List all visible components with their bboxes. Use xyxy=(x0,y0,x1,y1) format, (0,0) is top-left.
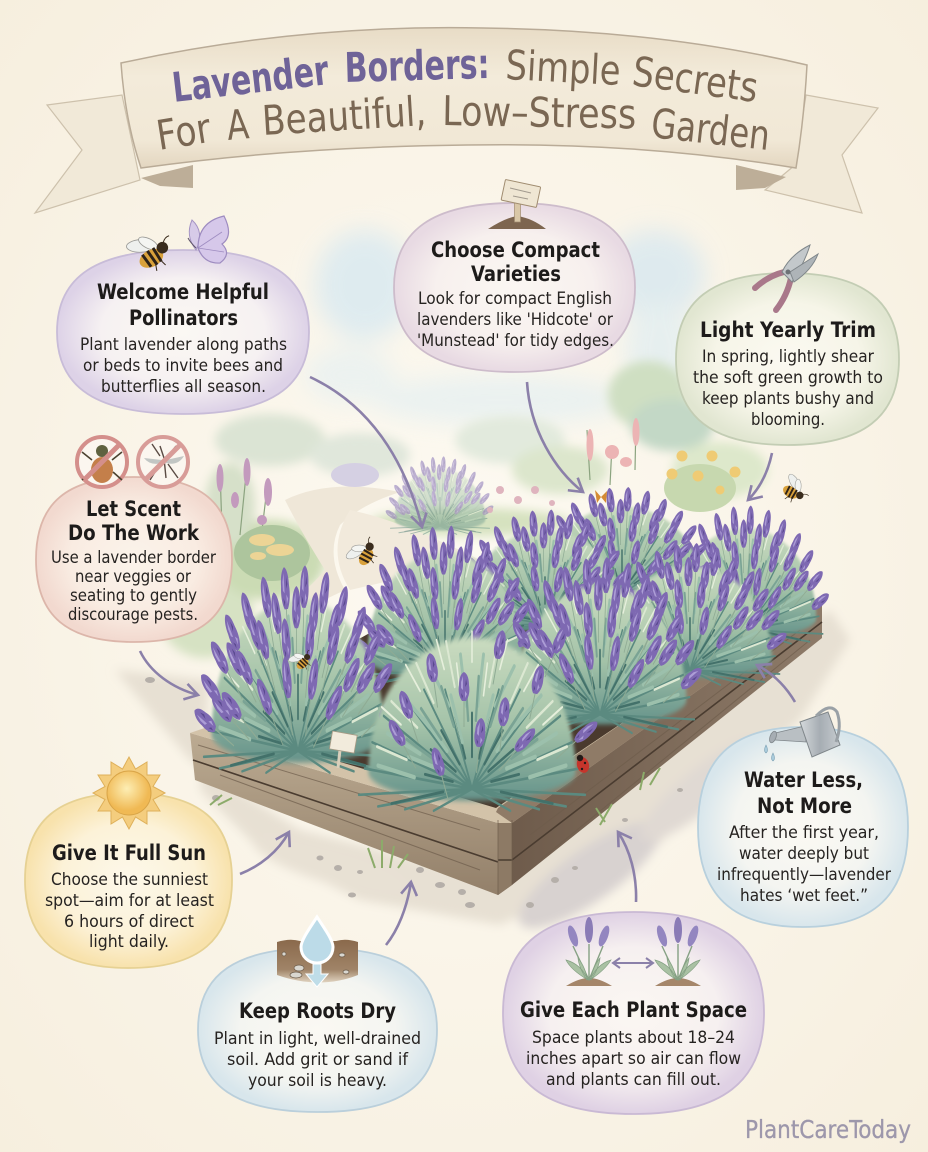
panel: let scent do the work: near veggies or xyxy=(75,567,192,587)
panel: water less, not more: infrequently—lavender xyxy=(717,865,892,885)
panel: let scent do the work: Let Scent xyxy=(86,497,181,521)
panel: choose compact varieties: lavenders like 'Hidcote' or xyxy=(417,310,614,330)
panel: keep roots dry: your soil is heavy. xyxy=(248,1071,387,1091)
icon: bee xyxy=(121,222,181,279)
icon: no beetle xyxy=(77,437,127,487)
icon: soil and water drop xyxy=(277,917,358,987)
icon: pruners xyxy=(755,245,818,310)
panel: light yearly trim: keep plants bushy and xyxy=(702,389,874,409)
icon: no mosquito xyxy=(138,437,188,487)
panel: give it full sun: spot—aim for at least xyxy=(45,891,214,911)
ladybug xyxy=(575,755,591,774)
panel: water less, not more: water deeply but xyxy=(739,844,869,864)
title: Lavender xyxy=(170,46,332,112)
panel: welcome helpful pollinators xyxy=(57,222,309,414)
panel: water less, not more: hates ‘wet feet.” xyxy=(740,886,868,906)
watermark: PlantCareToday xyxy=(745,1115,911,1144)
panel: welcome helpful pollinators: butterflies all season. xyxy=(101,377,266,397)
panel: let scent do the work xyxy=(36,437,232,642)
arrow: sun to bed xyxy=(240,832,289,874)
panel: let scent do the work: seating to gently xyxy=(70,586,197,606)
raised wooden bed xyxy=(190,560,822,895)
panel: water less, not more: Not More xyxy=(757,794,852,818)
arrow: roots to bed xyxy=(386,882,411,945)
panel: give each plant space xyxy=(503,912,764,1114)
panel: give it full sun: Give It Full Sun xyxy=(52,841,206,865)
panel: water less, not more xyxy=(698,708,908,927)
panel: welcome helpful pollinators: or beds to invite bees and xyxy=(83,356,283,376)
arrow: water to bed xyxy=(757,665,795,702)
panel: keep roots dry xyxy=(198,917,437,1112)
panel: choose compact varieties: Varieties xyxy=(471,262,561,286)
panel: choose compact varieties: Look for compact English xyxy=(418,289,612,309)
panel: give each plant space: inches apart so air can flow xyxy=(526,1049,741,1069)
garden background wash xyxy=(157,230,768,658)
title: Borders: xyxy=(344,40,490,92)
banner ribbon xyxy=(35,28,878,213)
panel: welcome helpful pollinators: Welcome Helpful xyxy=(97,280,269,304)
icon: watering can xyxy=(764,708,840,761)
panel: let scent do the work: discourage pests. xyxy=(68,605,198,625)
plant label in bed xyxy=(329,731,357,768)
panel: give it full sun: 6 hours of direct xyxy=(64,912,194,932)
panel: water less, not more: After the first year, xyxy=(729,823,879,843)
panel: keep roots dry: Keep Roots Dry xyxy=(239,999,396,1023)
title xyxy=(153,40,772,160)
panel: give it full sun xyxy=(25,757,232,968)
arrow: scent to bed xyxy=(140,651,198,695)
panel: keep roots dry: Plant in light, well-drained xyxy=(214,1029,421,1049)
arrow: pollinators to bed xyxy=(310,377,422,527)
panel: light yearly trim: In spring, lightly shear xyxy=(702,347,875,367)
panel: water less, not more: Water Less, xyxy=(744,768,863,792)
title: A xyxy=(225,100,251,150)
icon: plant sign xyxy=(488,179,546,229)
icon: two plants spaced apart xyxy=(566,917,701,986)
lavender bushes xyxy=(193,487,831,811)
panel: welcome helpful pollinators: Pollinators xyxy=(129,306,238,330)
arrow: trim to bed xyxy=(748,453,772,500)
title: Low–Stress xyxy=(442,87,637,138)
panel: light yearly trim: Light Yearly Trim xyxy=(700,318,876,342)
icon: butterfly xyxy=(188,216,229,263)
panel: choose compact varieties xyxy=(394,179,635,372)
panel: light yearly trim: the soft green growth to xyxy=(693,368,883,388)
title: For xyxy=(153,104,215,160)
panel: light yearly trim xyxy=(676,245,899,445)
arrow: compact varieties to bed xyxy=(527,382,583,492)
panel: give each plant space: Space plants about 18–24 xyxy=(532,1028,735,1048)
panel: choose compact varieties: Choose Compact xyxy=(431,238,600,262)
panel: choose compact varieties: 'Munstead' for tidy edges. xyxy=(417,331,614,351)
icon: sun xyxy=(93,757,165,829)
panel: keep roots dry: soil. Add grit or sand if xyxy=(227,1050,409,1070)
title: Garden xyxy=(649,99,772,160)
panel: let scent do the work: Use a lavender border xyxy=(51,548,217,568)
title: Secrets xyxy=(630,47,761,112)
background planting xyxy=(216,418,740,581)
arrow: space to bed xyxy=(618,832,636,902)
panel: give each plant space: and plants can fill out. xyxy=(546,1070,721,1090)
panel: light yearly trim: blooming. xyxy=(751,410,825,430)
title: Simple xyxy=(504,41,622,95)
grass tufts xyxy=(210,768,660,868)
panel: give each plant space: Give Each Plant Space xyxy=(520,998,747,1022)
panel: give it full sun: light daily. xyxy=(89,932,169,952)
panel: welcome helpful pollinators: Plant lavender along paths xyxy=(80,335,287,355)
front centre bush xyxy=(359,624,601,811)
title: Beautiful, xyxy=(261,87,427,145)
panel: give it full sun: Choose the sunniest xyxy=(51,870,208,890)
small bees and butterfly in garden xyxy=(286,470,815,676)
gravel ground around bed xyxy=(115,610,850,945)
panel: let scent do the work: Do The Work xyxy=(68,521,199,545)
